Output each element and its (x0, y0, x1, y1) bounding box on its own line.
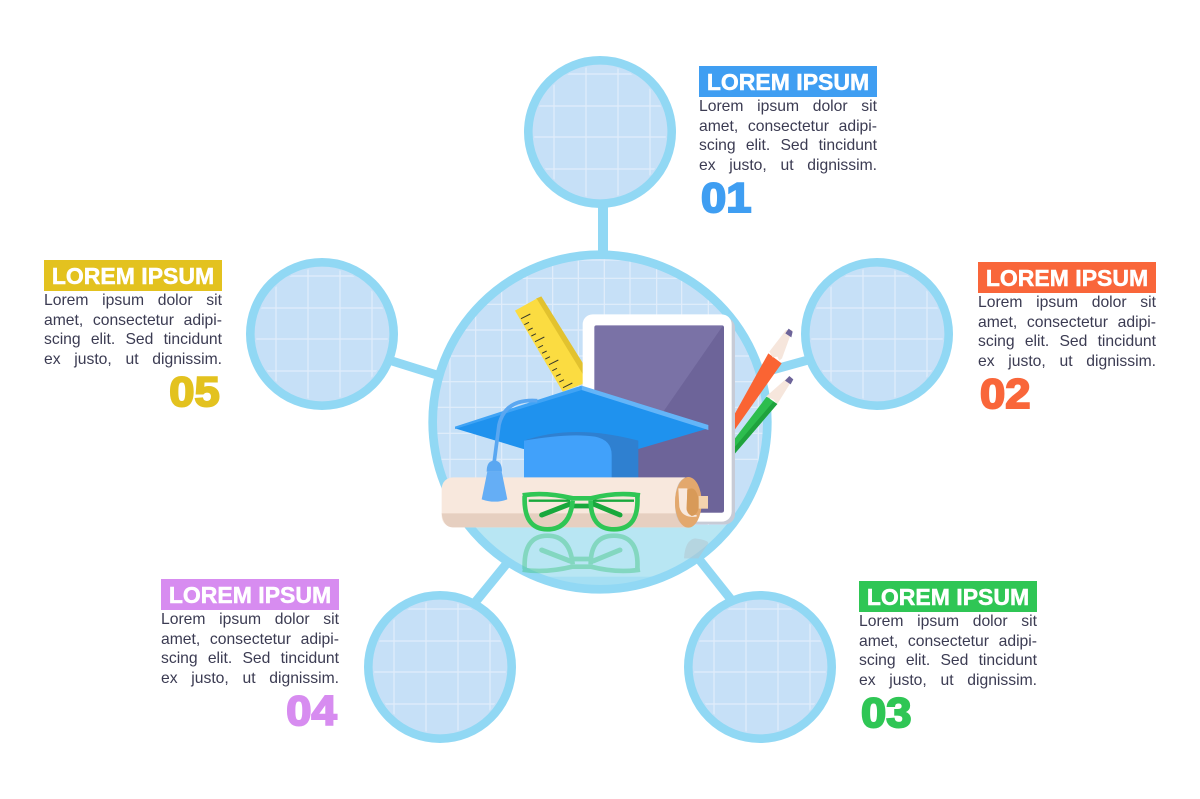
body text 01: ex justo, ut dignissim. (699, 156, 877, 174)
reflection of scroll end (684, 538, 708, 558)
icon: green glasses (523, 494, 640, 529)
text block 02 (978, 262, 1156, 417)
central circle (430, 250, 770, 595)
text block 01 (699, 66, 877, 221)
connector lines (392, 205, 808, 605)
heading 04: LOREM IPSUM (169, 582, 331, 608)
body text 01: amet, consectetur adipi- (699, 118, 877, 134)
heading 01: LOREM IPSUM (707, 69, 869, 95)
body text 03: scing elit. Sed tincidunt (859, 652, 1037, 669)
circle 02 (797, 254, 957, 414)
text block 05 (44, 260, 222, 415)
text block 04 (161, 579, 339, 734)
number 05: 05 (170, 368, 220, 415)
body text 03: ex justo, ut dignissim. (859, 672, 1037, 688)
body text 02: Lorem ipsum dolor sit (978, 294, 1156, 311)
body text 02 (978, 294, 1156, 370)
icon: graduation cap (455, 386, 708, 478)
body text 04: scing elit. Sed tincidunt (161, 650, 339, 667)
circle 03 (680, 587, 840, 747)
number 04: 04 (287, 687, 337, 734)
number 01: 01 (701, 174, 751, 221)
body text 05 (44, 292, 222, 368)
body text 01: Lorem ipsum dolor sit (699, 98, 877, 115)
body text 02: amet, consectetur adipi- (978, 314, 1156, 330)
body text 01: scing elit. Sed tincidunt (699, 137, 877, 154)
text block 03 (859, 581, 1037, 736)
hub diagram (246, 56, 953, 743)
body text 05: amet, consectetur adipi- (44, 312, 222, 328)
central education illustration (430, 250, 793, 595)
body text 02: ex justo, ut dignissim. (978, 352, 1156, 370)
heading 05: LOREM IPSUM (52, 263, 214, 289)
circle 05 (242, 254, 402, 414)
circle 01 (520, 52, 680, 212)
icon: diploma scroll (442, 477, 708, 528)
body text 05: ex justo, ut dignissim. (44, 350, 222, 368)
body text 05: Lorem ipsum dolor sit (44, 292, 222, 309)
number 02: 02 (980, 370, 1030, 417)
heading 02: LOREM IPSUM (986, 265, 1148, 291)
heading 03: LOREM IPSUM (867, 584, 1029, 610)
body text 05: scing elit. Sed tincidunt (44, 331, 222, 348)
icon: pencils (735, 329, 793, 453)
body text 03 (859, 613, 1037, 688)
reflection of glasses (523, 536, 640, 571)
circle 04 (360, 587, 520, 747)
body text 03: amet, consectetur adipi- (859, 632, 1037, 650)
body text 04: amet, consectetur adipi- (161, 630, 339, 648)
body text 01 (699, 98, 877, 174)
body text 02: scing elit. Sed tincidunt (978, 333, 1156, 350)
icon: ruler (515, 296, 584, 392)
number 03: 03 (861, 689, 911, 736)
icon: tassel (482, 461, 507, 502)
body text 04: ex justo, ut dignissim. (161, 670, 339, 686)
body text 03: Lorem ipsum dolor sit (859, 613, 1037, 630)
body text 04: Lorem ipsum dolor sit (161, 611, 339, 628)
icon: tablet (583, 314, 735, 524)
body text 04 (161, 611, 339, 686)
